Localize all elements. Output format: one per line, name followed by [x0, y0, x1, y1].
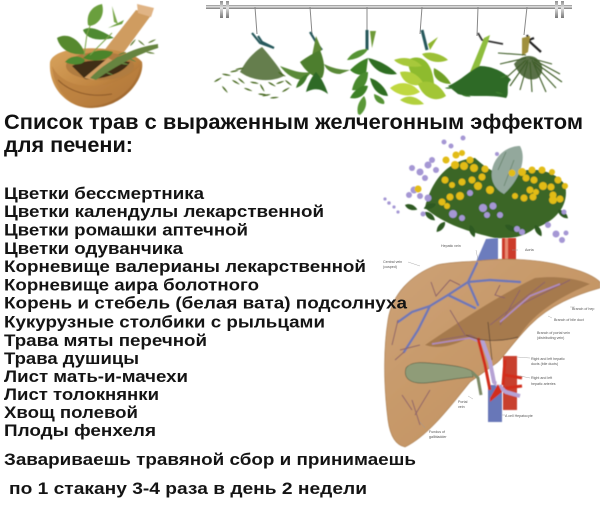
liver leader lines and labels: A cell Hepatocyte — [505, 414, 533, 418]
liver leader lines and labels: (cusped) — [383, 265, 397, 269]
dosage instruction — [4, 450, 416, 498]
liver leader lines and labels: Central vein — [383, 260, 402, 264]
herb list: Трава мяты перечной — [4, 331, 207, 350]
herb bunch 2 — [280, 32, 350, 94]
herb list: Корень и стебель (белая вата) подсолнуха — [4, 294, 408, 312]
hanging rod with brackets — [206, 1, 572, 36]
herb list: Трава душицы — [4, 349, 139, 368]
liver leader lines and labels: Branch of hep — [572, 307, 594, 311]
herb bunch 3 — [347, 30, 397, 115]
herb list: Цветки одуванчика — [4, 239, 184, 258]
liver leader lines and labels: Branch of portal vein — [537, 331, 570, 335]
hilum vessels — [482, 340, 520, 396]
small vessels — [392, 280, 570, 425]
herb list — [4, 184, 408, 440]
liver leader lines and labels: Hepatic vein — [441, 244, 461, 248]
title: для печени: — [4, 134, 133, 157]
title — [4, 111, 583, 157]
herb list: Корневище аира болотного — [4, 276, 259, 294]
herb list: Лист мать-и-мачехи — [4, 367, 188, 386]
liver body — [385, 259, 600, 447]
herb list: Корневище валерианы лекарственной — [4, 257, 366, 276]
herb bunch 1 — [214, 33, 292, 99]
liver leader lines and labels: ducts (bile ducts) — [531, 362, 558, 366]
title: Список трав с выраженным желчегонным эффектом — [4, 111, 583, 134]
flower bouquet — [383, 136, 570, 243]
herb list: Плоды фенхеля — [4, 421, 156, 440]
liver leader lines and labels — [383, 244, 594, 439]
herb list: Цветки бессмертника — [4, 184, 205, 203]
liver leader lines and labels: Right and left hepatic — [531, 357, 565, 361]
liver anatomy illustration — [385, 238, 600, 447]
herb list: Хвощ полевой — [4, 403, 138, 422]
gallbladder — [405, 363, 473, 383]
icon: mortar and pestle with herbs — [50, 4, 159, 108]
herb bunch 4 — [390, 30, 451, 105]
herb list: Кукурузные столбики с рыльцами — [4, 312, 325, 332]
liver leader lines and labels: Branch of bile duct — [554, 318, 584, 322]
herb list: Лист толокнянки — [4, 385, 159, 404]
blue hepatic veins — [398, 263, 520, 352]
herb list: Цветки календулы лекарственной — [4, 202, 324, 221]
dosage instruction: по 1 стакану 3-4 раза в день 2 недели — [9, 479, 367, 498]
darker lobe — [425, 277, 590, 347]
liver leader lines and labels: Right and left — [531, 376, 552, 380]
liver leader lines and labels: Portal — [458, 400, 468, 404]
herb bunch 6 — [498, 35, 562, 92]
liver leader lines and labels: Aorta — [525, 248, 534, 252]
liver leader lines and labels: gallbladder — [429, 435, 447, 439]
liver leader lines and labels: hepatic arteries — [531, 382, 556, 386]
herb bunch 5 — [445, 33, 511, 98]
liver leader lines and labels: Fundus of — [429, 430, 445, 434]
dosage instruction: Завариваешь травяной сбор и принимаешь — [4, 450, 416, 469]
inferior vena cava and aorta — [476, 238, 517, 422]
liver leader lines and labels: (distributing vein) — [537, 336, 564, 340]
liver leader lines and labels: vein — [458, 405, 465, 409]
herb list: Цветки ромашки аптечной — [4, 220, 248, 240]
